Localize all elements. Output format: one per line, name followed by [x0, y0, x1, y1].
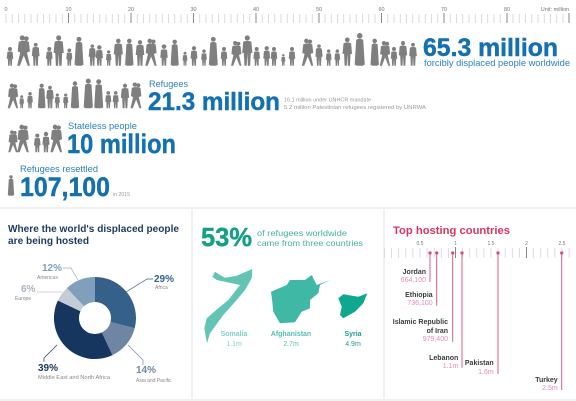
label: Middle East and North Africa: Middle East and North Africa	[38, 375, 110, 381]
label: Pakistan: 1.6m	[478, 369, 494, 376]
label: Jordan: 664,100	[401, 277, 426, 284]
percent caption	[257, 228, 363, 248]
label: Europe: 6%	[21, 284, 36, 295]
resettled stat	[20, 164, 130, 202]
ruler: unit million: 70	[441, 7, 447, 13]
percent caption: came from three countries	[257, 238, 363, 248]
panel: three countries	[201, 222, 367, 348]
ruler: unit million: 20	[128, 7, 134, 13]
panel: top hosting countries	[384, 225, 569, 392]
ruler: unit million: Unit: million	[541, 7, 569, 13]
donut leader lines	[37, 268, 153, 365]
scale: 1.5	[488, 241, 495, 247]
percent caption: of refugees worldwide	[257, 228, 347, 238]
scale: 2.5	[559, 241, 566, 247]
scale	[384, 241, 569, 258]
label: Pakistan: Pakistan	[465, 360, 494, 367]
label: Asia and Pacific	[136, 365, 172, 384]
big percent: 53%	[201, 222, 252, 252]
label: Jordan: Jordan	[403, 269, 426, 276]
refugees note: 16.1 million under UNHCR mandate	[284, 98, 371, 104]
people row: 65.3 million silhouettes	[7, 33, 417, 66]
heading: Top hosting countries	[393, 225, 510, 237]
label: Iran: Islamic Republic	[393, 319, 448, 326]
refugees stat: 21.3 million	[148, 88, 280, 116]
label: Iran: of Iran	[427, 328, 448, 335]
ruler: unit million: 50	[316, 7, 322, 13]
heading: are being hosted	[8, 236, 89, 247]
ruler: unit million: 30	[190, 7, 197, 13]
headline: 65.3 million: 65.3 million	[423, 34, 558, 62]
label: Syria	[344, 331, 362, 348]
label: Ethiopia	[405, 292, 433, 307]
map: Syria	[338, 293, 367, 318]
label: Ethiopia: Ethiopia	[405, 292, 433, 299]
ruler: unit million: 0	[4, 7, 8, 13]
people row: refugees silhouettes	[8, 79, 141, 108]
scale: 2	[525, 241, 528, 247]
people row: stateless silhouettes	[8, 125, 62, 152]
headline: 65.3 million: forcibly displaced people worldwide	[424, 58, 570, 69]
label: Afghanistan: 2.7m	[283, 341, 299, 348]
label: Americas: 12%	[42, 263, 62, 274]
refugees note: 5.2 million Palestinian refugees registered by UNRWA	[284, 105, 427, 111]
label: Afghanistan	[271, 331, 311, 348]
ruler: unit million	[4, 7, 569, 23]
label: Asia and Pacific: 14%	[136, 365, 156, 376]
icon: single person, resettled	[8, 175, 14, 196]
ruler: unit million: 80	[504, 7, 510, 13]
stateless stat: Stateless people	[68, 121, 137, 132]
heading	[8, 224, 180, 247]
map: Somalia	[204, 269, 252, 343]
scale: 0.5	[417, 241, 424, 247]
label: Afghanistan: Afghanistan	[271, 331, 311, 338]
panel: where hosted	[8, 224, 180, 384]
label: Europe	[15, 284, 36, 302]
label: Lebanon	[429, 355, 458, 370]
heading: Where the world's displaced people	[8, 224, 180, 235]
label: Syria: 4.9m	[345, 341, 361, 348]
label: Turkey: Turkey	[535, 377, 558, 384]
panel dividers	[0, 207, 576, 401]
label: Americas: Americas	[37, 275, 58, 281]
label: Africa	[154, 274, 174, 291]
label: Middle East and North Africa	[38, 363, 110, 381]
label: Africa: Africa	[155, 285, 168, 291]
ruler: unit million: 40	[253, 7, 259, 13]
refugees stat: Refugees	[149, 79, 188, 90]
ruler: unit million: 10	[65, 7, 72, 13]
map: Afghanistan	[271, 275, 330, 323]
label: Asia and Pacific: Asia and Pacific	[136, 378, 172, 384]
resettled stat: Refugees resettled	[20, 164, 98, 175]
label: Lebanon: Lebanon	[429, 355, 458, 362]
label: Ethiopia: 736,100	[407, 300, 433, 307]
resettled stat: 107,100	[20, 172, 110, 202]
resettled stat: in 2015	[113, 192, 130, 198]
ruler: unit million: 60	[378, 7, 385, 13]
label: Jordan	[401, 269, 426, 284]
label: Turkey	[535, 377, 558, 392]
label: Turkey: 2.5m	[542, 385, 558, 392]
label: Somalia	[221, 331, 248, 348]
label: Africa: 29%	[154, 274, 174, 285]
stateless stat: 10 million	[67, 129, 176, 159]
label: Lebanon: 1.1m	[443, 363, 458, 370]
refugees note	[284, 98, 427, 111]
label: Iran: 979,400	[423, 336, 448, 343]
label: Syria: Syria	[344, 331, 362, 338]
scale: 1	[454, 241, 457, 247]
label: Middle East and North Africa: 39%	[38, 363, 58, 374]
donut chart	[54, 277, 136, 359]
label: Iran	[393, 319, 448, 343]
label: Somalia: Somalia	[221, 331, 248, 338]
label: Somalia: 1.1m	[226, 341, 242, 348]
label: Pakistan	[465, 360, 494, 376]
label: Americas	[37, 263, 62, 281]
label: Europe: Europe	[15, 296, 31, 302]
marker lines	[429, 252, 563, 390]
